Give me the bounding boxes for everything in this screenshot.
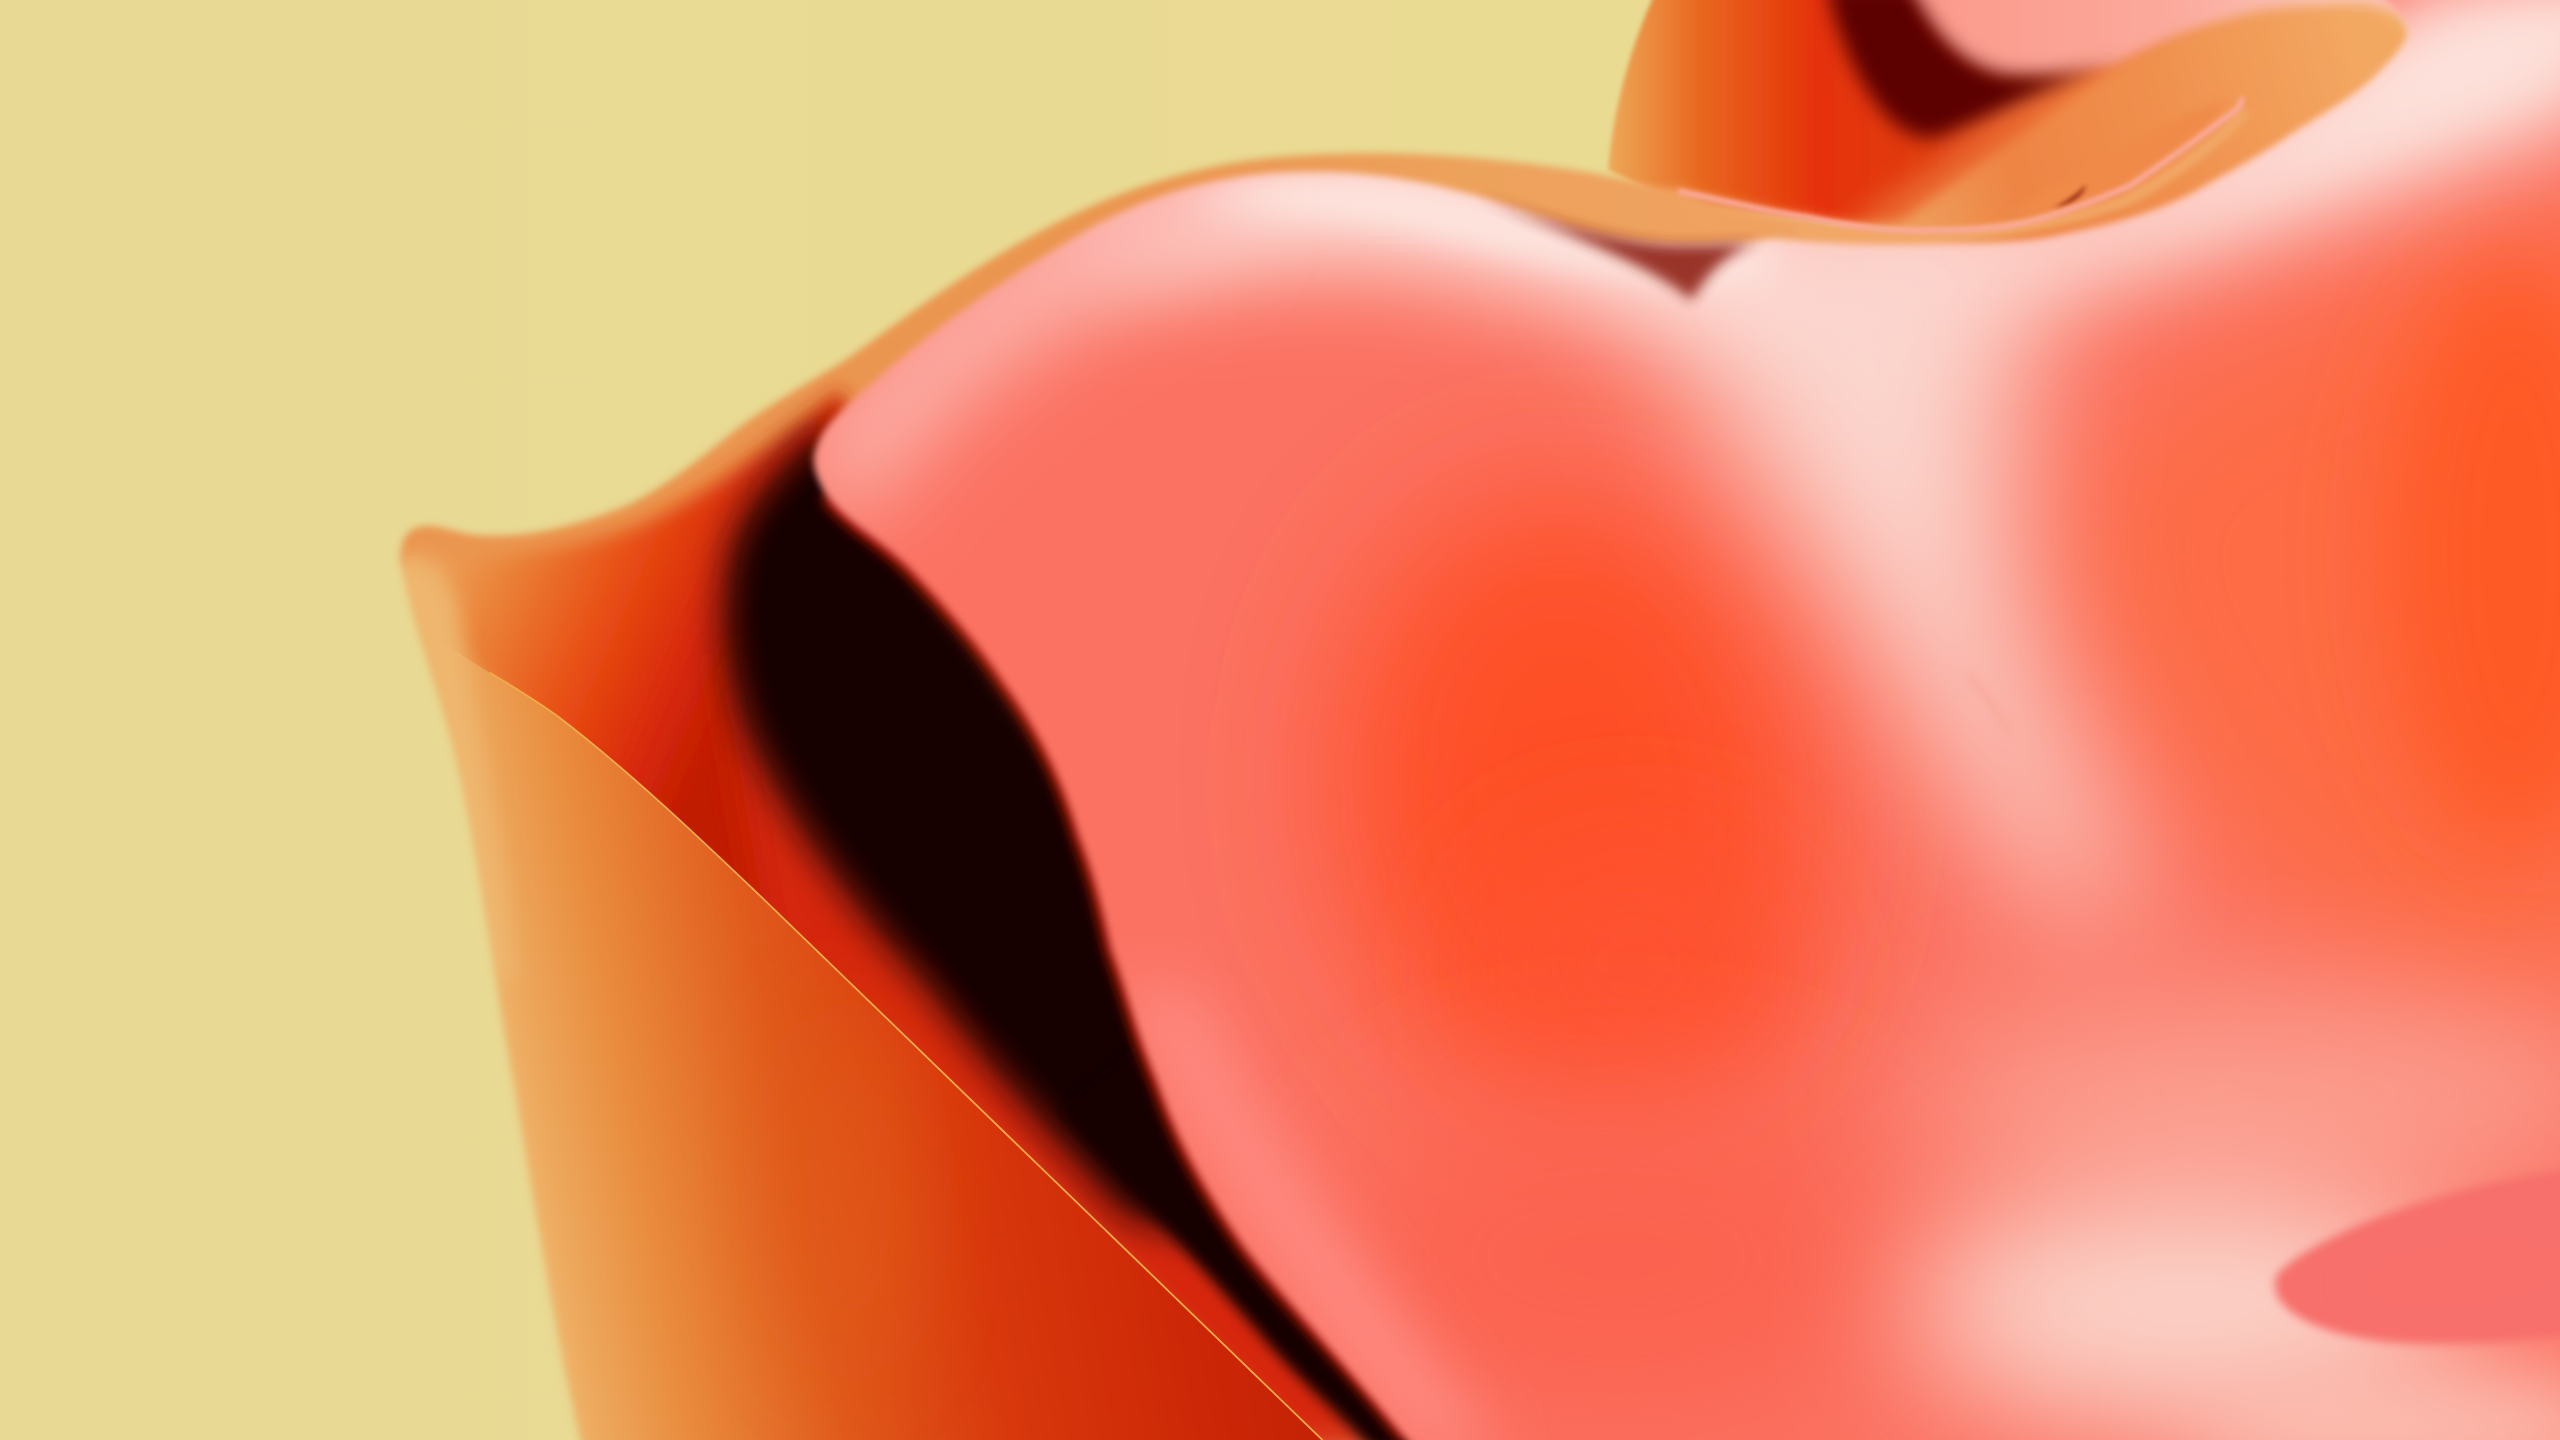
surface: left edge highlight [792,147,1224,522]
surface: lower right mid pink [1910,996,2560,1192]
top rim: pale strip below the pink line [1796,111,2247,237]
surface: lower orange lobe [1486,849,1780,1078]
surface: lower coral pool [1339,1094,1894,1420]
surface: central pink ridge [1600,202,2125,947]
top rim: orange sheet swoop [1665,3,2412,261]
soft red edge along the coral surface [826,495,1407,1440]
dark shadow: upper mass [725,428,1249,1249]
shoulder: lower red fill between the line and shadow [728,706,1374,1440]
surface: bottom right pale highlight [1910,1184,2465,1429]
bottom-right hollow [2275,1169,2560,1344]
crease under the top rim [1478,196,1760,300]
surface: saturated orange core [1298,460,1853,1140]
surface: top highlight [1061,135,1812,317]
surface: pale core of upper right band [1959,0,2560,245]
back fold: pink top surface [1894,0,2449,80]
top rim: pink curl line [1678,98,2241,231]
pale soft glow along the tip and left edge [400,552,514,970]
surface: pink left rim lower [1118,980,1502,1440]
surface: small dimple [1967,673,2008,735]
top rim: small dark tick [2054,184,2087,207]
main body base [396,149,1718,1440]
surface: right orange mass [2073,212,2560,1002]
surface: upper right band highlight [1763,0,2560,315]
hollow: warmer centre [2348,1223,2560,1324]
flap edge highlight line [490,673,1322,1440]
back fold: dark crease [1827,0,2116,138]
surface: bottom edge pale [2188,1371,2560,1440]
top rim: inner curl shade [2008,98,2230,219]
lower-left flap [460,654,1321,1440]
dark shadow: lower tail [1060,1105,1414,1440]
flap: warm glow near the fold [776,1012,922,1371]
back fold: top right orange shape [1608,0,2449,245]
surface: top highlight bright core [1176,179,1780,281]
shoulder: orange to red gradient [462,380,936,1064]
surface: right orange core [2384,261,2560,849]
coral surface [784,0,2560,1440]
back fold: soft transition into the rim [1845,73,2155,245]
